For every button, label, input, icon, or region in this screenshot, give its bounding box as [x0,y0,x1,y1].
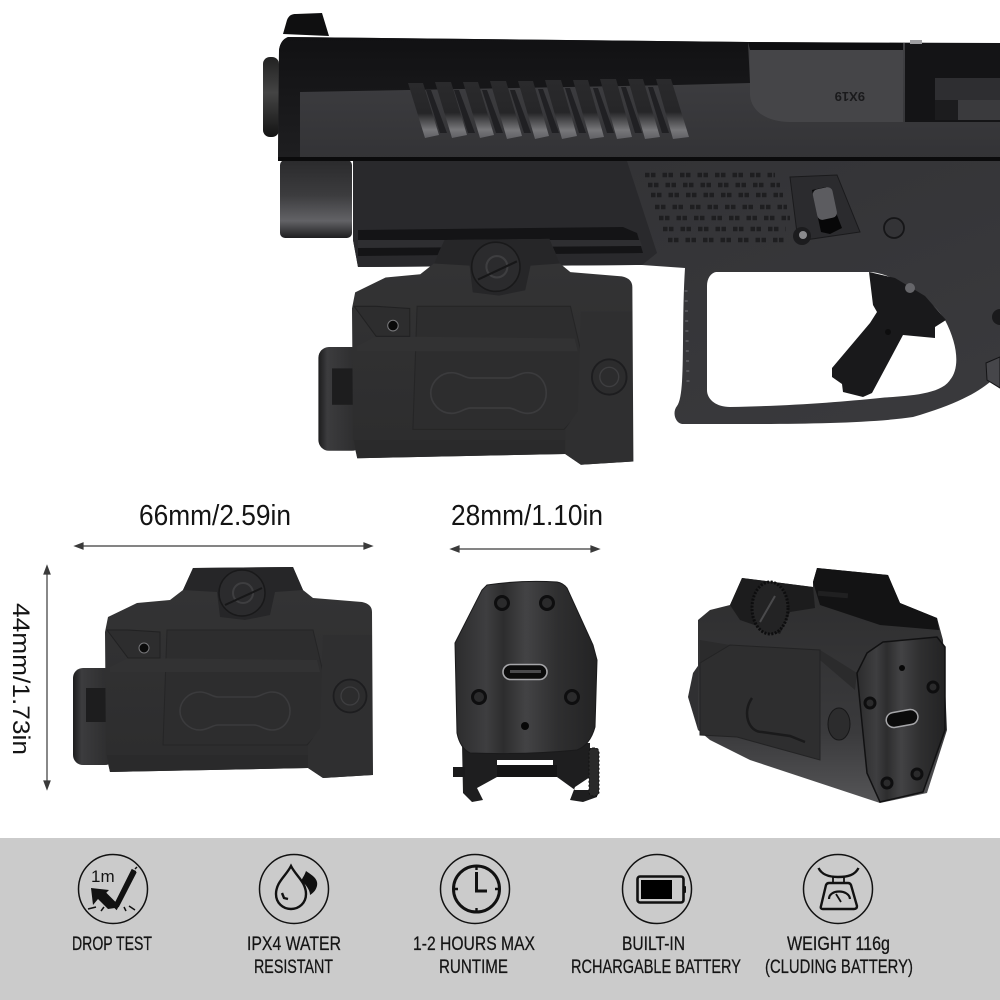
plate screws [865,682,938,788]
light body [352,239,633,465]
rail channel [813,568,939,630]
label: 1-2 HOURS MAX [413,934,535,955]
side panel [700,645,820,760]
rear sight block [905,43,1000,122]
body panels [163,630,323,745]
width label: 28mm/1.10in [451,500,603,532]
label: WEIGHT 116g [787,934,890,955]
length label: 66mm/2.59in [139,500,291,532]
top band [700,640,857,690]
dimension: height [7,566,50,789]
front sight [283,13,329,36]
feature: battery [571,854,741,978]
takedown lever [790,175,904,245]
feature: drop test [72,854,152,955]
height label: 44mm/1.73in [7,603,34,755]
mount tab [434,239,560,296]
slide upper bevel [278,37,750,157]
USB-C port [503,664,547,680]
length arrow [75,543,372,549]
magazine release [986,357,1000,388]
accessory rail [358,227,643,256]
icon: kitchen scale [804,854,872,924]
feature: battery: RCHARGABLE BATTERY [571,957,741,978]
slide [278,37,1000,160]
rear view of light [453,581,599,802]
mounting screws [472,596,578,704]
slide serration inner strips [426,87,669,133]
height arrow [44,566,50,789]
frame texture dots [645,175,790,240]
trigger guard checkering [686,290,688,382]
side view of light [73,567,373,778]
tab logo [472,242,520,291]
logo slot [431,373,546,413]
feature: weight: (CLUDING BATTERY) [765,957,913,978]
hole [521,722,529,730]
calibre marking: 9X19 [835,89,865,104]
slide serrations [408,79,689,139]
lens [73,668,115,765]
housing [698,568,947,803]
icon: clock [440,854,510,924]
picatinny mount [453,743,599,802]
band background [0,838,1000,1000]
dust cover [353,158,657,267]
power button [828,708,850,740]
feature: water resistance: RESISTANT [254,957,333,978]
feature: weight [765,854,913,978]
pistol frame and trigger guard [353,156,1000,424]
power button [334,680,366,712]
hole [899,665,905,671]
icon: water drops [260,854,328,924]
pistol photo [263,13,1000,424]
front plate [857,637,945,802]
feature: runtime: RUNTIME [439,957,508,978]
feature: runtime [413,854,535,978]
tab logo [219,570,265,616]
body panels [413,306,581,429]
features band [0,838,1000,1000]
trigger [832,272,946,397]
rear housing [455,581,597,754]
muzzle crown [263,57,279,137]
USB-C port [885,708,919,729]
logo arc [747,698,805,742]
feature: water resistance [247,854,341,978]
slide-frame seam [278,157,1000,161]
mount clamp [730,578,815,634]
dimension: width [451,500,603,552]
screw recess [107,630,160,658]
lens [318,347,362,451]
power button [592,359,627,395]
label: DROP TEST [72,934,152,955]
weapon light mounted on pistol [318,239,633,465]
angled view of light [688,568,947,803]
ejection port [750,50,903,122]
lens [688,663,712,735]
dimension: length [75,500,372,549]
width arrow [451,546,599,552]
screw recess [354,306,410,336]
logo slot [180,692,290,730]
icon: drop test: 1m [91,867,115,886]
mount tab [183,567,303,620]
barrel [280,160,352,238]
light body [105,567,373,778]
label: IPX4 WATER [247,934,341,955]
thumb wheel [752,582,788,634]
label: BUILT-IN [622,934,685,955]
icon: battery [622,854,692,924]
